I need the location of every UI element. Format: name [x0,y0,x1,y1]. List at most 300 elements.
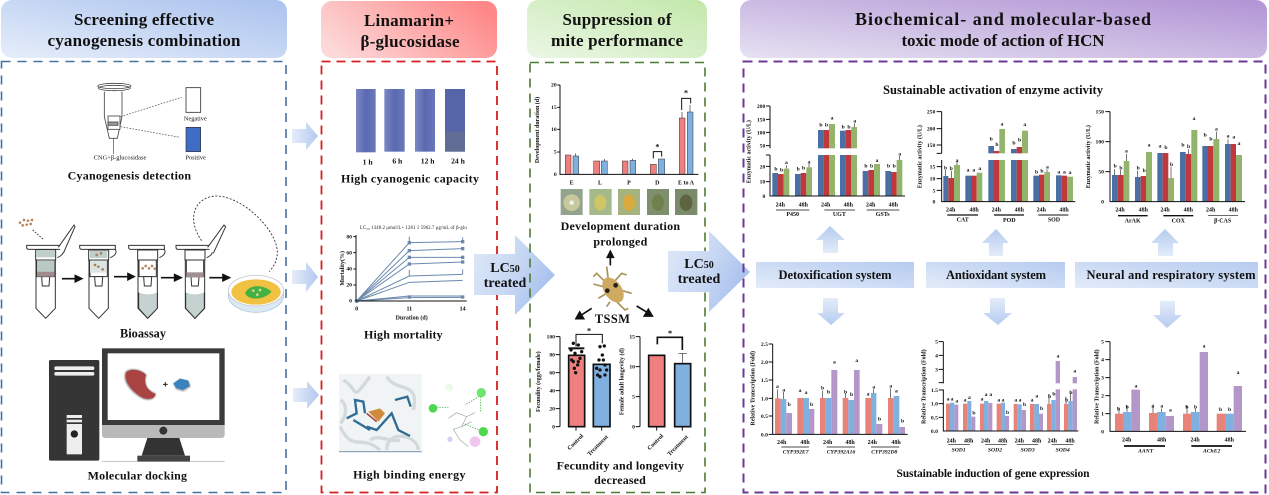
chart: CAT POD SOD enzyme activity: b [1040,168,1043,174]
chart: AANT AChE gene expression: 48h [1157,437,1167,443]
chart: P450 UGT GSTs enzyme activity: a [853,119,856,125]
fecundity chart: 60 [549,371,555,377]
mortality chart: LC₅₀ 1348.2 μmol/L+ 1281 1 5962.7 μg/mL of β-glu [360,226,467,231]
chart: P450 UGT GSTs enzyme activity: 24h [776,202,786,208]
chart: AANT AChE gene expression: AANT [1137,449,1154,455]
chart: CYP gene expression: a [867,391,870,397]
arrow right-down [637,306,652,316]
chart: CYP gene expression: Relative Transcription (Fold) [750,351,757,426]
icon: monitor [102,348,225,462]
chart: SOD gene expression [920,340,1078,454]
chart: CYP gene expression: 0.0 [761,432,768,438]
chart: SOD gene expression: b [1052,391,1055,397]
chart: CYP gene expression: a [889,383,892,389]
chart: SOD gene expression: b [1069,390,1072,396]
chart: CYP gene expression: 1.0 [761,396,768,402]
chart: CAT POD SOD enzyme activity: 48h [969,207,979,213]
chart: AANT AChE gene expression: 2 [1101,394,1104,400]
chart: SOD gene expression: a [981,397,984,403]
chart: AANT AChE gene expression: b [1219,407,1222,413]
chart: SOD gene expression: 24h [1015,438,1025,444]
header: linamarin: Linamarin+ [364,11,454,30]
chart: P450 UGT GSTs enzyme activity: 150 [757,117,766,123]
chart: CYP gene expression: 0.5 [761,414,768,420]
chart: CYP gene expression: 2.0 [761,360,768,366]
chart: P450 UGT GSTs enzyme activity: b [870,164,873,170]
development chart [534,83,698,187]
chart: SOD gene expression: 24h [1048,438,1058,444]
chart: ArAK COX beta-CAS enzyme activity: b [1114,163,1117,169]
chart: CAT POD SOD enzyme activity: a [978,166,981,172]
chart: P450 UGT GSTs enzyme activity: 48h [844,202,854,208]
chart: CAT POD SOD enzyme activity: a [972,168,975,174]
longevity chart: Treatment [667,434,690,458]
chart: P450 UGT GSTs enzyme activity: 50 [760,144,766,150]
development chart: P [627,181,631,187]
chart: AANT AChE gene expression: 4 [1101,358,1104,364]
fecundity chart [535,325,610,458]
icon: petri dish [228,275,284,312]
header: linamarin [321,1,497,58]
chart: P450 UGT GSTs enzyme activity: 0 [763,194,766,200]
strip times: 6 h [392,157,403,166]
chart: P450 UGT GSTs enzyme activity: a [898,151,901,157]
longevity chart: 10 [629,365,635,371]
chart: AANT AChE gene expression: b [1228,407,1231,413]
mortality chart: 60 [346,250,352,256]
chart: CYP gene expression: CYP392E7 [783,450,810,456]
chart: P450 UGT GSTs enzyme activity: 100 [757,130,766,136]
arrow [209,275,229,281]
chart: ArAK COX beta-CAS enzyme activity: a [1125,149,1128,155]
chart: SOD gene expression: b [1048,394,1051,400]
chart: CAT POD SOD enzyme activity: CAT [957,217,969,223]
chart: ArAK COX beta-CAS enzyme activity: b [1204,133,1207,139]
longevity chart: Control [647,433,665,452]
chart: CAT POD SOD enzyme activity: a [1063,169,1066,175]
chart: AANT AChE gene expression: a [1151,403,1154,409]
chart: CAT POD SOD enzyme activity: 24h [992,207,1002,213]
chart: SOD gene expression: a [1057,353,1060,359]
icon: computer tower [49,360,99,461]
icon: tube 2 [80,245,116,318]
chart: P450 UGT GSTs enzyme activity: a [876,158,879,164]
strip labels: Positive [185,155,206,162]
chart: SOD gene expression: SOD1 [952,448,966,454]
header: toxic mode: toxic mode of action of HCN [902,31,1105,50]
chart: CAT POD SOD enzyme activity: POD [1003,218,1016,224]
chart: P450 UGT GSTs enzyme activity: 24h [821,202,831,208]
mortality chart: 20 [346,283,352,289]
heading: fecundity and longevity decreased: decreased [594,473,646,487]
chart: SOD gene expression: 1.5 [931,388,938,394]
arrow down neural [1153,301,1182,328]
chart: ArAK COX beta-CAS enzyme activity [1085,110,1245,224]
chart: AANT AChE gene expression: 5 [1101,340,1104,346]
chart: AANT AChE gene expression [1094,340,1246,455]
chart: AANT AChE gene expression: b [1126,405,1129,411]
development chart: E [570,181,574,187]
panel: cyanogenesis combination [2,62,286,492]
icon: tube 3 [129,245,165,318]
fecundity chart: Control [567,433,585,452]
heading: development duration prolonged [561,219,680,249]
strip labels: Negative [184,115,207,122]
heading: cyanogenesis detection: Cyanogenesis detection [68,168,191,182]
chart: SOD gene expression: a [1031,398,1034,404]
chart: CYP gene expression: b [827,389,830,395]
longevity chart: 15 [629,335,635,341]
chart: CAT POD SOD enzyme activity: 0 [933,200,936,206]
chart: CAT POD SOD enzyme activity: b [950,166,953,172]
arrow: to panel 2 bottom [293,381,319,409]
chart: CAT POD SOD enzyme activity: b [1018,138,1021,144]
chart: CYP gene expression: b [850,392,853,398]
chart: SOD gene expression: a [1014,397,1017,403]
mortality chart: 80 [346,234,352,240]
chart: SOD gene expression: SOD2 [988,448,1002,454]
chart: P450 UGT GSTs enzyme activity: a [831,115,834,121]
chart: AANT AChE gene expression: 24h [1122,437,1132,443]
development chart: Development duration (d) [534,97,541,163]
fecundity chart: * [587,325,591,335]
chart: ArAK COX beta-CAS enzyme activity: a [1159,143,1162,149]
mortality chart: 11 [407,307,412,313]
chart: CYP gene expression: CYP392A16 [827,450,855,456]
chart: SOD gene expression: 48h [964,438,974,444]
chart: CAT POD SOD enzyme activity: a [1057,169,1060,175]
mortality chart: Duration (d) [396,314,428,321]
chart: P450 UGT GSTs enzyme activity: 24h [866,202,876,208]
chart: AANT AChE gene expression: b [1194,404,1197,410]
strip times: 1 h [363,158,373,167]
chart: AANT AChE gene expression: b [1117,407,1120,413]
chart: P450 UGT GSTs enzyme activity: Enzymatic activity (U/L) [746,120,753,183]
chart: P450 UGT GSTs enzyme activity: P450 [786,212,799,218]
development chart: L [598,181,602,187]
header: toxic mode [740,0,1267,58]
life-stage photos [561,189,697,215]
chart: AANT AChE gene expression: a [1237,370,1240,376]
panel: linamarin [322,62,497,492]
arrow up [607,251,613,265]
longevity chart: 5 [632,395,635,401]
mortality chart: 14 [460,307,466,313]
arrow: to panel 2 top [292,122,318,150]
chart: P450 UGT GSTs enzyme activity: a [785,160,788,166]
fecundity chart: Treatment [587,434,610,458]
chart: ArAK COX beta-CAS enzyme activity: b [1187,144,1190,150]
label TSSM: TSSM [595,312,630,326]
chart: ArAK COX beta-CAS enzyme activity: 24h [1115,207,1125,213]
chart: P450 UGT GSTs enzyme activity: a [808,159,811,165]
negative strip [186,88,201,112]
heading: fecundity and longevity decreased: Fecundity and longevity [557,458,684,472]
chart: CAT POD SOD enzyme activity: a [1023,122,1026,128]
positive strip [186,127,201,152]
chart: SOD gene expression: a [1073,369,1076,375]
chart: ArAK COX beta-CAS enzyme activity: a [1148,143,1151,149]
chart: SOD gene expression: a [997,398,1000,404]
icon: tube 4 [176,225,226,318]
chart: SOD gene expression: a [968,395,971,401]
chart: P450 UGT GSTs enzyme activity: GSTs [876,212,890,218]
chart: AANT AChE gene expression: a [1135,383,1138,389]
development chart: 5 [554,150,557,156]
arrow: LC50 treated 1 [474,235,555,315]
heading: development duration prolonged: Development duration [561,219,680,233]
chart: ArAK COX beta-CAS enzyme activity: COX [1172,218,1186,224]
chart: SOD gene expression: 48h [998,438,1008,444]
chart: CYP gene expression: b [844,389,847,395]
chart: CAT POD SOD enzyme activity: 5 [933,188,936,194]
chart: P450 UGT GSTs enzyme activity: 10 [760,180,766,186]
mortality chart: Mortality(%) [339,251,346,286]
arrow left-down [576,308,592,319]
chart: SOD gene expression: a [951,397,954,403]
chart: ArAK COX beta-CAS enzyme activity: 150 [1096,110,1104,116]
chart: CAT POD SOD enzyme activity: b [990,137,993,143]
chart: SOD gene expression: 0.0 [931,429,938,435]
system label: antioxidant [926,262,1065,288]
panel frame purple [744,62,1266,492]
chart: CAT POD SOD enzyme activity: 48h [1015,207,1025,213]
chart: SOD gene expression: 0.5 [931,415,938,421]
development chart: D [655,181,660,187]
docking structure [339,374,422,452]
chart: CYP gene expression: 2.5 [761,342,768,348]
chart: AANT AChE gene expression: AChE2 [1202,449,1220,455]
chart: AANT AChE gene expression: 48h [1225,437,1235,443]
chart: ArAK COX beta-CAS enzyme activity: 0 [1101,200,1104,206]
header: screening: cyanogenesis combination [48,31,241,50]
arrow up neural [1151,229,1179,256]
chart: SOD gene expression: 1.0 [931,402,938,408]
header: suppression [527,0,707,58]
chart: CAT POD SOD enzyme activity: 10 [930,177,936,183]
chart: AANT AChE gene expression: Relative Transcription (Fold) [1094,349,1101,424]
chart: ArAK COX beta-CAS enzyme activity: β-CAS [1214,218,1232,224]
chart: AANT AChE gene expression: a [1203,343,1206,349]
chart: CYP gene expression: 48h [891,440,901,446]
chart: ArAK COX beta-CAS enzyme activity: 50 [1098,170,1104,176]
chart: AANT AChE gene expression: b [1185,404,1188,410]
longevity chart: Female adult longevity (d) [618,348,625,415]
strip times: 12 h [421,157,435,166]
fecundity chart: 40 [549,389,555,395]
chart: CYP gene expression: b [821,385,824,391]
chart: SOD gene expression: 48h [1065,438,1075,444]
chart: SOD gene expression: a [1002,398,1005,404]
chart: CYP gene expression: a [805,390,808,396]
chart: CAT POD SOD enzyme activity: 250 [927,110,936,116]
arrow [114,274,134,280]
icon: cyanogenesis tube [98,83,182,154]
chart: CYP gene expression: b [878,417,881,423]
chart: AANT AChE gene expression: 0 [1101,429,1104,435]
chart: P450 UGT GSTs enzyme activity: UGT [833,212,846,218]
system label: neural and respiratory: Neural and respiratory system [1086,268,1256,282]
heading: fecundity and longevity decreased [557,458,684,487]
chart: ArAK COX beta-CAS enzyme activity: 48h [1139,207,1149,213]
arrow: LC50 treated 2 [668,231,750,312]
chart: CYP gene expression: 24h [868,440,878,446]
test strips [356,89,465,152]
chart: CYP gene expression: a [782,387,785,393]
chart: P450 UGT GSTs enzyme activity: b [819,123,822,129]
chart: SOD gene expression: 24h [947,438,957,444]
mortality chart [339,226,467,321]
chart: ArAK COX beta-CAS enzyme activity: b [1170,162,1173,168]
chart: P450 UGT GSTs enzyme activity: b [847,125,850,131]
chart: P450 UGT GSTs enzyme activity: 48h [889,202,899,208]
chart: ArAK COX beta-CAS enzyme activity: 48h [1229,207,1239,213]
fecundity chart: 80 [549,353,555,359]
header: screening [1,0,287,58]
heading: high mortality: High mortality [364,328,443,342]
chart: ArAK COX beta-CAS enzyme activity: b [1119,165,1122,171]
chart: ArAK COX beta-CAS enzyme activity: 24h [1206,207,1216,213]
chart: CAT POD SOD enzyme activity: 24h [1037,207,1047,213]
chart: P450 UGT GSTs enzyme activity [746,104,905,218]
chart: CAT POD SOD enzyme activity: b [1035,169,1038,175]
protein model [124,369,191,400]
chart: CAT POD SOD enzyme activity: 150 [927,143,936,149]
chart: ArAK COX beta-CAS enzyme activity: a [1227,133,1230,139]
chart: SOD gene expression: 4 [935,353,938,359]
system label: detoxification [756,262,914,288]
chart: SOD gene expression: a [1019,398,1022,404]
arrow: LC50 treated 1: LC50 [490,261,520,276]
chart: SOD gene expression: b [972,411,975,417]
ligand interaction map [429,383,488,447]
chart: CYP gene expression: a [855,358,858,364]
heading: development duration prolonged: prolonged [593,235,648,249]
chart: AANT AChE gene expression: 24h [1190,437,1200,443]
fecundity chart: Fecundity (eggs/female) [535,351,542,412]
chart: CYP gene expression: 24h [777,440,787,446]
panel contents [339,89,488,481]
icon: mite TSSM [593,267,632,310]
chart: CAT POD SOD enzyme activity: a [1069,170,1072,176]
header: suppression: mite performance [551,31,683,50]
chart: CYP gene expression: CYP392D8 [871,450,898,456]
chart: SOD gene expression: 48h [1032,438,1042,444]
panel contents [19,83,284,482]
development chart: * [684,88,688,97]
header: screening: Screening effective [74,10,214,29]
heading: molecular docking: Molecular docking [88,468,187,482]
heading: high binding energy: High binding energy [353,467,465,481]
arrow: LC50 treated 2: LC50 [684,257,714,272]
chart: CYP gene expression: a [799,388,802,394]
arrow up detox [816,226,845,253]
chart: CAT POD SOD enzyme activity: b [944,165,947,171]
header: linamarin: β-glucosidase [360,32,460,51]
chart: CYP gene expression: b [901,419,904,425]
chart: SOD gene expression: a [1035,394,1038,400]
development chart: * [655,142,659,151]
panel: toxic mode of action [744,62,1266,492]
chart: SOD gene expression: b [1006,410,1009,416]
chart: P450 UGT GSTs enzyme activity: b [887,164,890,170]
chart: CAT POD SOD enzyme activity: 15 [930,165,936,171]
chart: CAT POD SOD enzyme activity [916,110,1075,224]
chart: P450 UGT GSTs enzyme activity: b [893,164,896,170]
chart: CYP gene expression: 1.5 [761,378,768,384]
system label: detoxification: Detoxification system [778,268,892,282]
chart: ArAK COX beta-CAS enzyme activity: 100 [1096,140,1104,146]
chart: ArAK COX beta-CAS enzyme activity: ArAK [1125,218,1141,224]
arrow down detox [817,298,845,325]
chart: P450 UGT GSTs enzyme activity: 48h [799,202,809,208]
chart: CYP gene expression: 24h [823,440,833,446]
strip times [363,157,466,167]
chart: SOD gene expression: SOD3 [1021,448,1035,454]
chart: ArAK COX beta-CAS enzyme activity: b [1181,143,1184,149]
arrow: LC50 treated 2: treated [678,272,720,287]
chart: SOD gene expression: 3 [935,367,938,373]
panel frame blue [2,62,286,492]
chart: ArAK COX beta-CAS enzyme activity: a [1193,116,1196,122]
chart: AANT AChE gene expression: a [1160,403,1163,409]
chart: P450 UGT GSTs enzyme activity: b [797,167,800,173]
mortality chart: 40 [346,267,352,273]
chart: CAT POD SOD enzyme activity: Enzymatic activity (U/L) [916,125,923,188]
heading: bioassay: Bioassay [120,326,167,340]
chart: CAT POD SOD enzyme activity: 48h [1059,207,1069,213]
development chart: 0 [554,172,557,178]
chart: P450 UGT GSTs enzyme activity: b [842,125,845,131]
chart: AANT AChE gene expression: 3 [1101,376,1104,382]
chart: CYP gene expression: 48h [800,440,810,446]
chart: CYP gene expression: a [833,359,836,365]
chart: CAT POD SOD enzyme activity: a [967,168,970,174]
arrow: to panel 2 middle [292,262,318,292]
system label: neural and respiratory [1075,262,1258,288]
chart: CAT POD SOD enzyme activity: 200 [927,127,936,133]
dashed return arrow [194,196,277,272]
development chart: 15 [551,105,557,111]
development chart: E to A [678,181,695,187]
chart: P450 UGT GSTs enzyme activity: b [774,167,777,173]
longevity chart [618,328,691,458]
panel frame green [530,62,705,492]
chart: CYP gene expression: a [872,385,875,391]
icon: tube 1 [27,225,75,318]
chart: ArAK COX beta-CAS enzyme activity: 24h [1160,207,1170,213]
chart: CAT POD SOD enzyme activity: b [1012,140,1015,146]
chart: CAT POD SOD enzyme activity: a [1001,122,1004,128]
chart: P450 UGT GSTs enzyme activity: b [802,165,805,171]
chart: P450 UGT GSTs enzyme activity: b [864,164,867,170]
chart: CAT POD SOD enzyme activity: 24h [946,207,956,213]
arrow [62,276,82,282]
development chart: 10 [551,127,557,133]
chart: P450 UGT GSTs enzyme activity: b [825,123,828,129]
chart: P450 UGT GSTs enzyme activity: 20 [760,164,766,170]
chart: SOD gene expression: a [989,392,992,398]
fecundity chart: 100 [547,335,555,341]
chart: SOD gene expression: b [1065,398,1068,404]
strip labels: CNG+β-glucosidase [94,155,147,162]
chart: CAT POD SOD enzyme activity: a [1046,165,1049,171]
chart: ArAK COX beta-CAS enzyme activity: b [1164,145,1167,151]
chart: CYP gene expression: b [788,402,791,408]
arrow: LC50 treated 1: treated [484,276,526,291]
longevity chart: 0 [632,424,635,430]
chart: SOD gene expression: a [985,392,988,398]
